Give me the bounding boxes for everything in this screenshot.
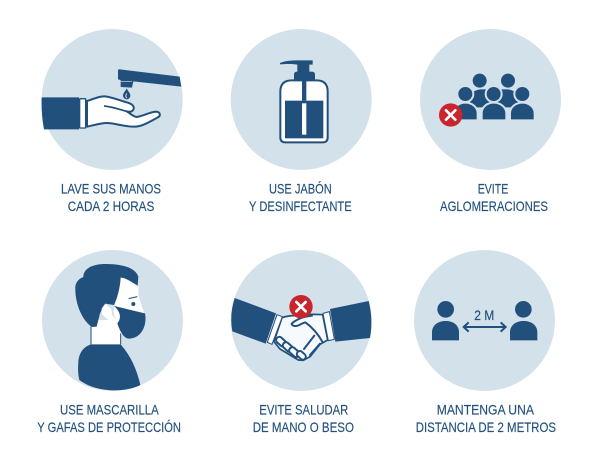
distance label: 2 M <box>474 307 494 323</box>
caption: DE MANO O BESO <box>253 419 354 435</box>
panel: soap <box>231 29 372 214</box>
icon: person with mask <box>75 264 146 390</box>
panel: mask <box>37 250 183 435</box>
caption: USE JABÓN <box>269 180 332 196</box>
circle background <box>42 29 183 170</box>
caption: MANTENGA UNA <box>437 402 535 418</box>
icon: two people two meters apart <box>432 301 537 340</box>
panel: avoid crowds <box>420 29 561 214</box>
caption: Y GAFAS DE PROTECCIÓN <box>37 419 181 435</box>
circle background <box>414 250 555 391</box>
icon: handshake with prohibition mark <box>231 295 371 361</box>
circle background <box>420 29 561 170</box>
caption <box>37 402 181 435</box>
icon: hand under faucet <box>42 69 181 129</box>
caption <box>249 180 352 214</box>
caption: Y DESINFECTANTE <box>249 198 352 214</box>
panel: wash hands <box>42 29 183 214</box>
caption <box>253 402 354 435</box>
caption <box>61 180 161 214</box>
icon: crowd with prohibition mark <box>439 74 535 127</box>
caption <box>440 180 548 214</box>
icon: soap dispenser <box>280 60 328 142</box>
circle background <box>42 250 183 391</box>
circle background <box>231 250 372 391</box>
panel: no handshake <box>231 250 372 435</box>
circle background <box>231 29 372 170</box>
caption: EVITE <box>478 180 508 196</box>
caption: EVITE SALUDAR <box>259 402 348 418</box>
caption: CADA 2 HORAS <box>68 198 154 214</box>
caption: DISTANCIA DE 2 METROS <box>416 419 556 435</box>
caption: AGLOMERACIONES <box>440 198 548 214</box>
caption: LAVE SUS MANOS <box>61 180 161 196</box>
panel: keep distance <box>414 250 556 435</box>
caption <box>416 402 556 435</box>
caption: USE MASCARILLA <box>60 402 159 418</box>
